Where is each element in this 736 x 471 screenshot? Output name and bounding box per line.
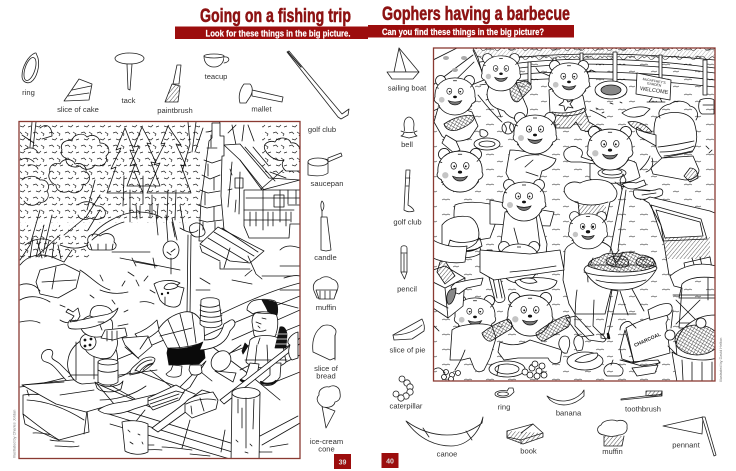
gopher bodies [434,68,699,268]
page number 40 [382,453,398,468]
cabin with stone chimney [166,123,300,243]
label: ring (bottom): ring [498,402,510,412]
cat in life vest [122,280,235,377]
baseball and food scraps [474,81,714,164]
banner: right instruction: Can you find these things in the big picture? [382,27,544,38]
background trees [20,122,300,260]
label: slice of bread: bread [316,372,336,380]
icon: muffin [313,277,338,299]
credit: illustrator left: Illustrated by Charles Jordan [12,410,16,458]
icon: sailing boat [387,48,419,79]
dog in cap [220,299,302,404]
shoreline and water strokes [60,246,300,323]
page number 39 [334,454,351,469]
icon: pennant [663,417,716,456]
label: muffin (bottom): muffin [602,447,623,456]
sandwich and tackle box [148,385,218,418]
label: caterpillar: caterpillar [390,402,423,410]
icon: paintbrush [165,65,181,102]
welcome sign: McCAFFREY'S [642,77,667,85]
bucket with lid [95,359,123,392]
label: pennant: pennant [672,440,701,450]
label: slice of bread: slice of [314,364,338,373]
barbecue grill with lid [584,197,718,339]
label: slice of pie: slice of pie [390,346,425,354]
page number 40: 40 [386,458,394,466]
label: banana: banana [556,408,582,418]
icon: candle [321,201,331,251]
icon: slice of cake [64,79,92,101]
icon: ring [22,53,39,83]
title: Gophers having a barbecue: Gophers having a barbecue [382,3,570,25]
icon: golf club (right) [404,170,414,212]
icon: teacup [204,54,229,67]
label: book: book [520,446,537,456]
title: Going on a fishing trip: Going on a fishing trip [200,5,351,27]
label: ring: ring [22,88,35,97]
icon: bell [401,117,417,138]
icon: toothbrush [621,391,662,400]
label: canoe: canoe [437,450,457,458]
path, rocks and riverbank [20,234,300,323]
picnic table [200,227,264,279]
boat [22,378,114,440]
label: mallet: mallet [251,104,273,114]
panel: fishing trip picture [19,122,302,463]
charcoal bag [620,303,672,363]
label: golf club (right): golf club [393,218,422,226]
welcome sign: WELCOME [640,86,669,96]
label: ice-cream cone: cone [318,444,335,454]
tent corner [433,48,502,122]
label: candle: candle [314,253,337,262]
icon: banana [547,390,584,405]
label: teacup: teacup [205,72,227,81]
label: tack: tack [122,96,136,105]
label: saucepan: saucepan [311,179,343,188]
banner: left instruction: Look for these things in the big picture. [206,28,350,40]
panel: gophers barbecue picture [433,48,719,382]
label: muffin: muffin [316,303,336,312]
label: toothbrush: toothbrush [625,404,661,414]
icon: muffin (chef hat) [598,420,627,446]
dock post [122,388,260,463]
icon: saucepan [308,153,342,176]
dock planks [20,283,300,459]
icon: book [507,424,543,444]
label: paintbrush: paintbrush [157,106,193,115]
garden fence [475,48,715,95]
icon: slice of pie [393,319,424,340]
gopher heads [434,54,633,336]
welcome sign: GARDEN [647,81,662,88]
baseball bat and cooler [433,240,564,318]
label: ice-cream cone: ice-cream [310,437,343,446]
welcome sign [636,73,671,102]
oars, rope and tackle [98,357,212,432]
banner: left instruction [175,26,368,40]
icon: ring (bottom) [495,388,514,398]
landing net [207,345,241,382]
icon: caterpillar [393,376,413,401]
icon: canoe [406,417,483,446]
cat with flowered hat [42,305,128,384]
label: golf club (left): golf club [308,125,336,134]
icon: slice of bread [313,325,336,360]
water ripples [33,433,288,456]
label: sailing boat: sailing boat [388,84,427,92]
page number 39: 39 [339,460,346,466]
seated gophers with corn [433,278,660,382]
label: slice of cake: slice of cake [57,105,99,114]
icon: pencil [401,246,407,279]
icon: tack [115,53,144,90]
icon: golf club (left) [287,51,349,119]
credit: illustrator right: Illustrated by David Helton [719,338,723,382]
chef gopher and apron [563,156,663,342]
icon: mallet [239,84,283,103]
foliage texture [20,123,300,260]
label: bell: bell [401,140,413,149]
label: pencil: pencil [397,284,417,294]
bottom-right basket [665,315,719,382]
icon: ice-cream cone [317,386,340,428]
stacked pails [200,298,222,328]
charcoal bag: CHARCOAL [633,332,662,349]
